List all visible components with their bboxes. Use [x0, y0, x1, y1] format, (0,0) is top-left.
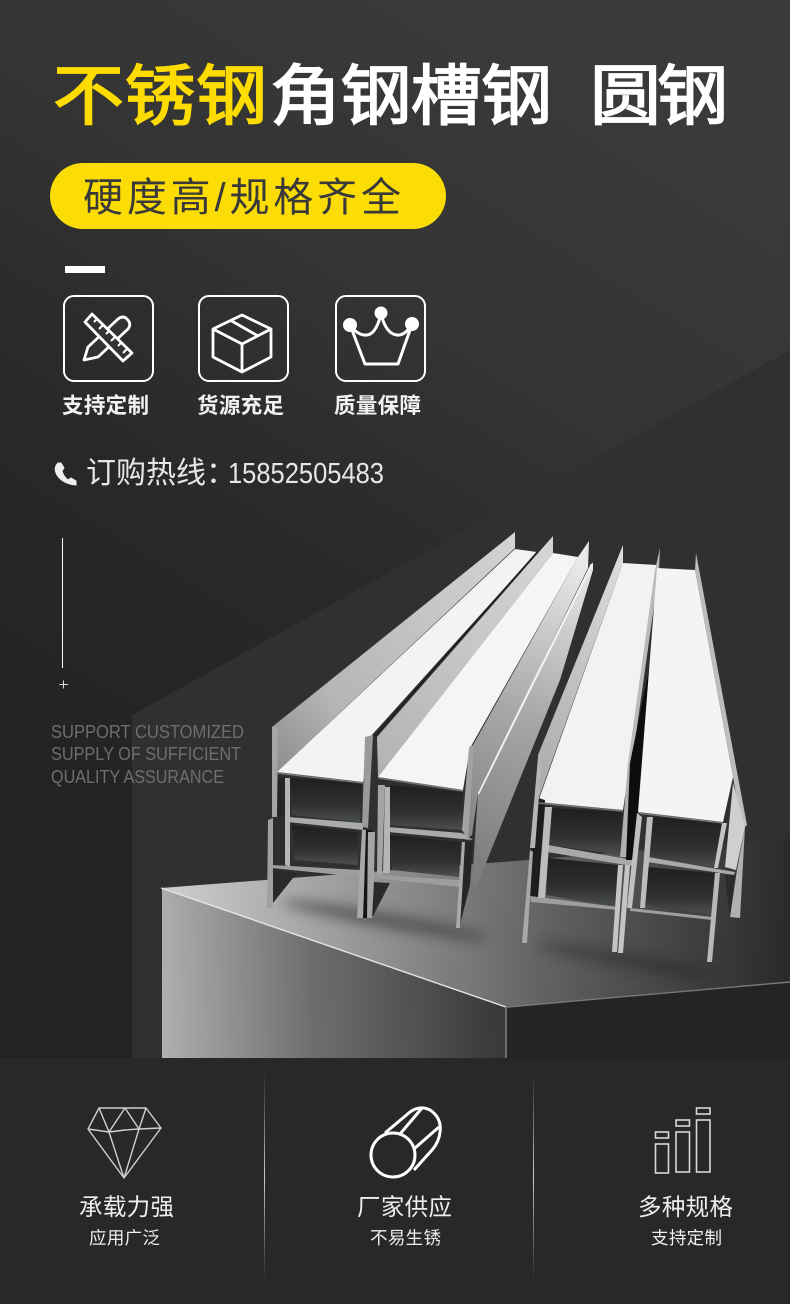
subtitle pill [50, 163, 446, 229]
english tagline: SUPPLY OF SUFFICIENT [51, 744, 241, 764]
feature: factory supply: 不易生锈 [370, 1228, 441, 1248]
hotline: 订购热线： [86, 457, 236, 490]
feature: many specifications: 支持定制 [651, 1228, 722, 1248]
feature: load capacity [79, 1108, 174, 1248]
beam B [367, 536, 589, 928]
display block [161, 838, 790, 1058]
vertical line and plus [60, 538, 68, 688]
feature: quality assurance [334, 296, 425, 418]
hotline: 15852505483 [228, 458, 384, 490]
subtitle pill: 硬度高/规格齐全 [83, 176, 401, 220]
feature: load capacity: 承载力强 [79, 1194, 174, 1220]
feature: custom support [62, 296, 153, 418]
icon: diamond [88, 1108, 161, 1178]
english tagline: SUPPORT CUSTOMIZED [51, 722, 244, 742]
accent bar [65, 266, 105, 273]
title: 圆钢 [590, 59, 728, 133]
feature: quality assurance: 质量保障 [334, 394, 421, 418]
title: 不锈钢 [53, 59, 267, 133]
beam A [267, 532, 537, 918]
feature: many specifications [638, 1108, 733, 1248]
bottom dividers [264, 1072, 534, 1282]
icon: phone [55, 463, 76, 485]
steel beams left group [267, 532, 593, 928]
hotline [55, 457, 384, 490]
english tagline: QUALITY ASSURANCE [51, 767, 224, 787]
beam E [618, 553, 747, 962]
icon: crown [344, 308, 418, 364]
steel beams right group [522, 545, 747, 962]
feature: many specifications: 多种规格 [638, 1194, 733, 1220]
icon: steel cylinder [371, 1108, 440, 1177]
icon: ruler and pencil [84, 314, 132, 361]
feature: factory supply: 厂家供应 [357, 1194, 452, 1220]
title [53, 59, 728, 133]
icon: bars [656, 1108, 710, 1173]
beam C back panel [472, 562, 593, 885]
feature: factory supply [357, 1108, 452, 1248]
english tagline [51, 722, 244, 787]
feature: load capacity: 应用广泛 [89, 1228, 160, 1248]
feature: custom support: 支持定制 [62, 393, 149, 418]
title: 角钢槽钢 [270, 59, 552, 133]
icon: box [213, 315, 271, 372]
feature: sufficient supply [197, 296, 288, 418]
feature: sufficient supply: 货源充足 [197, 394, 284, 418]
beam D [522, 545, 660, 952]
